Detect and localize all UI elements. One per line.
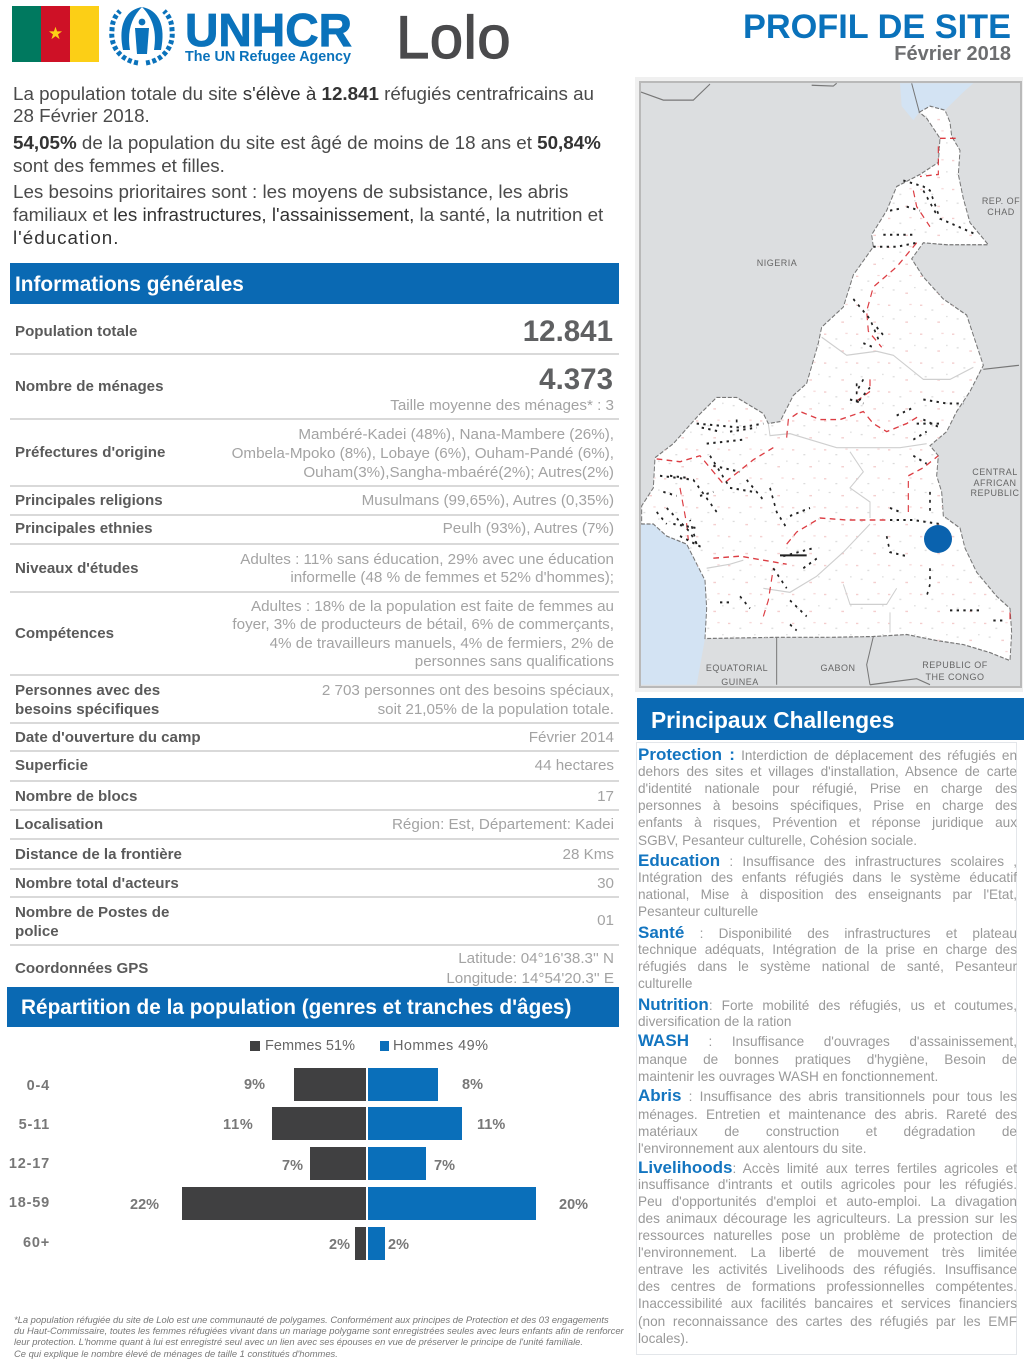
heading: principaux challenges bbox=[637, 698, 1024, 740]
women percentage labels: 9% bbox=[244, 1077, 265, 1093]
men percentage labels: 8% bbox=[462, 1077, 483, 1093]
men percentage labels bbox=[388, 1077, 588, 1253]
panel: general information table bbox=[10, 315, 619, 987]
protection bbox=[638, 745, 1017, 848]
row: coordonnées GPS: Latitude: 04°16'38.3'' N bbox=[458, 950, 614, 967]
row: nombre de ménages: Nombre de ménages bbox=[15, 378, 163, 395]
nutrition bbox=[638, 995, 1017, 1029]
row: nombre de postes de police: Nombre de Postes de bbox=[15, 904, 169, 920]
row: niveaux d'études: informelle (48 % de femmes et 52% d'hommes); bbox=[290, 568, 614, 586]
row: préfectures d'origine bbox=[10, 420, 619, 487]
santé bbox=[638, 923, 1017, 991]
row: nombre de postes de police: police bbox=[15, 922, 59, 940]
livelihoods: ressources naturelles pose un problème de protection de bbox=[638, 1228, 1017, 1243]
row: distance de la frontière: 28 Kms bbox=[562, 846, 614, 863]
education: national, Mise à disposition des enseignants par l'Etat, bbox=[638, 887, 1017, 902]
row: préfectures d'origine: Mambéré-Kadei (48%), Nana-Mambere (26%), bbox=[298, 426, 614, 442]
row: nombre de ménages: 4.373 bbox=[539, 363, 613, 396]
WASH: manque de bonnes pratiques d'hygiène, Besoin de bbox=[638, 1052, 1017, 1067]
row: nombre total d'acteurs: Nombre total d'acteurs bbox=[15, 875, 179, 892]
row: préfectures d'origine: Ombela-Mpoko (8%), Lobaye (6%), Ouham-Pandé (6%), bbox=[232, 444, 614, 462]
row: personnes avec des besoins spécifiques bbox=[10, 676, 619, 724]
age labels: 12-17 bbox=[9, 1156, 50, 1172]
country labels: GABON bbox=[820, 663, 856, 673]
legend: Hommes 49% bbox=[393, 1038, 488, 1054]
row: distance de la frontière bbox=[10, 840, 619, 870]
row: principales ethnies: Peulh (93%), Autres (7%) bbox=[443, 520, 614, 537]
intro text block: sont des femmes et filles. bbox=[13, 155, 225, 176]
education: Intégration des enfants réfugiés dans le système éducatif bbox=[638, 870, 1017, 885]
row: nombre de ménages: Taille moyenne des ménages* : 3 bbox=[390, 397, 614, 414]
women percentage labels: 7% bbox=[282, 1158, 303, 1174]
row: compétences: personnes sans qualifications bbox=[415, 653, 614, 670]
women bars bbox=[182, 1068, 366, 1260]
row: personnes avec des besoins spécifiques: besoins spécifiques bbox=[15, 701, 159, 718]
country labels: REPUBLIC bbox=[970, 488, 1020, 498]
row: compétences bbox=[10, 593, 619, 676]
row: principales religions bbox=[10, 487, 619, 516]
footnote: du Haut-Commissaire, toutes les femmes réfugiées vivant dans un mariage polygame sont enregistrées seules avec leurs enfants afin de renforcer bbox=[14, 1325, 624, 1336]
panel: challenges text bbox=[636, 742, 1017, 1355]
row: niveaux d'études: Niveaux d'études bbox=[15, 560, 139, 577]
row: nombre de postes de police: 01 bbox=[597, 912, 614, 929]
footnote bbox=[14, 1314, 624, 1359]
row: localisation bbox=[10, 811, 619, 840]
UNHCR wordmark: UNHCR bbox=[185, 4, 352, 56]
protection: SGBV, Pesanteur culturelle, Cohésion sociale. bbox=[638, 833, 917, 848]
livelihoods: Livelihoods: Accès limité aux terres fertiles agricoles et bbox=[638, 1158, 1017, 1177]
women percentage labels: 2% bbox=[329, 1237, 350, 1253]
nutrition: diversification de la ration bbox=[638, 1014, 791, 1029]
men percentage labels: 7% bbox=[434, 1158, 455, 1174]
row: nombre total d'acteurs: 30 bbox=[597, 875, 614, 892]
intro text block: l'éducation. bbox=[13, 227, 119, 248]
row: coordonnées GPS: Coordonnées GPS bbox=[15, 960, 148, 977]
santé: Santé : Disponibilité des infrastructures et plateau bbox=[638, 923, 1017, 942]
country labels: NIGERIA bbox=[757, 258, 797, 268]
row: superficie bbox=[10, 752, 619, 782]
external borders bbox=[641, 83, 1019, 685]
men percentage labels: 20% bbox=[559, 1197, 588, 1213]
abris: ménages. Entretien et maintenance des abris. Rareté des bbox=[638, 1107, 1017, 1122]
heading: répartition de la population bbox=[7, 987, 619, 1027]
santé: culturelle bbox=[638, 976, 692, 991]
nutrition: Nutrition: Forte mobilité des réfugiés, us et coutumes, bbox=[638, 995, 1017, 1014]
row: compétences: 4% de travailleurs manuels, 4% de fermiers, 2% de bbox=[270, 635, 614, 652]
WASH: maintenir les ouvrages WASH en fonctionnement. bbox=[638, 1069, 938, 1084]
age labels: 60+ bbox=[23, 1235, 50, 1251]
row: nombre de postes de police bbox=[10, 898, 619, 946]
country labels: THE CONGO bbox=[925, 672, 985, 682]
abris bbox=[638, 1086, 1017, 1156]
men bars bbox=[368, 1068, 536, 1260]
protection: Protection : Interdiction de déplacement des réfugiés en bbox=[638, 745, 1017, 764]
row: compétences: Adultes : 18% de la population est faite de femmes au bbox=[251, 598, 614, 615]
men percentage labels: 2% bbox=[388, 1237, 409, 1253]
intro text block: 28 Février 2018. bbox=[13, 105, 150, 126]
livelihoods: insuffisance d'intrants et outils agricoles pour les réfugiés. bbox=[638, 1177, 1017, 1192]
row: principales ethnies: Principales ethnies bbox=[15, 520, 153, 537]
santé: technique adéquats, Intégration de la prise en charge des bbox=[638, 942, 1017, 957]
faint localities bbox=[642, 106, 1012, 661]
row: principales religions: Musulmans (99,65%), Autres (0,35%) bbox=[362, 492, 614, 509]
row: nombre de blocs bbox=[10, 782, 619, 811]
row: niveaux d'études: Adultes : 11% sans éducation, 29% avec une éducation bbox=[240, 551, 614, 568]
row: distance de la frontière: Distance de la frontière bbox=[15, 846, 182, 863]
protection: personnes à besoins spécifiques, Prise en charge des bbox=[638, 798, 1017, 813]
icon: UNHCR emblem bbox=[109, 7, 175, 66]
row: nombre de blocs: 17 bbox=[597, 788, 614, 805]
age labels bbox=[9, 1078, 50, 1251]
row: date d'ouverture: Date d'ouverture du camp bbox=[15, 729, 201, 746]
WASH: WASH : Insuffisance d'ouvrages d'assainissement, bbox=[638, 1031, 1017, 1050]
row: superficie: Superficie bbox=[15, 757, 88, 774]
row: nombre total d'acteurs bbox=[10, 870, 619, 898]
country labels: EQUATORIAL bbox=[706, 663, 768, 673]
country labels: CENTRAL bbox=[972, 467, 1018, 477]
livelihoods: des animaux décourage les agriculteurs. La pression sur les bbox=[638, 1211, 1017, 1226]
row: population totale: 12.841 bbox=[523, 315, 613, 348]
date: Février 2018 bbox=[894, 43, 1011, 65]
Cameroon territory bbox=[642, 106, 1012, 661]
education bbox=[638, 851, 1017, 919]
water bodies bbox=[641, 83, 973, 685]
site name: Lolo bbox=[396, 4, 511, 71]
row: nombre de ménages bbox=[10, 355, 619, 420]
footnote: *La population réfugiée du site de Lolo est une communauté de polygames. Conformément aux principes de Protection et des 03 engagements bbox=[14, 1314, 609, 1325]
country labels: AFRICAN bbox=[973, 478, 1017, 488]
livelihoods: l'environnement. La liberté de mouvement très limitée bbox=[638, 1245, 1017, 1260]
row: préfectures d'origine: Ouham(3%),Sangha-mbaéré(2%); Autres(2%) bbox=[303, 464, 614, 480]
row: nombre de blocs: Nombre de blocs bbox=[15, 788, 137, 805]
education: Education : Insuffisance des infrastructures scolaires , bbox=[638, 851, 1017, 870]
intro text block: 54,05% de la population du site est âgé de moins de 18 ans et 50,84% bbox=[13, 132, 601, 153]
santé: réfugiés dans le système national de santé, Pesanteur bbox=[638, 959, 1017, 974]
livelihoods: Peu d'opportunités d'emploi et auto-emploi. La divagation bbox=[638, 1194, 1017, 1209]
map background bbox=[640, 82, 1021, 687]
women percentage labels: 22% bbox=[130, 1197, 159, 1213]
legend: Femmes 51% bbox=[265, 1038, 355, 1054]
marker: Lolo site bbox=[924, 525, 952, 553]
footnote: Ce qui explique le nombre élevé de ménages de taille 1 constitués d'hommes. bbox=[14, 1348, 338, 1359]
age labels: 0-4 bbox=[27, 1078, 50, 1094]
heading: informations générales bbox=[10, 263, 619, 304]
row: superficie: 44 hectares bbox=[535, 757, 614, 774]
livelihoods: (non reconnaissance des cartes des réfugiés par les EMF bbox=[638, 1314, 1017, 1329]
internal borders bbox=[707, 337, 973, 633]
heading: informations générales: Informations générales bbox=[15, 273, 244, 296]
row: compétences: foyer, 3% de producteurs de bétail, 6% de commerçants, bbox=[232, 616, 614, 633]
row: préfectures d'origine: Préfectures d'origine bbox=[15, 444, 165, 461]
intro text block: Les besoins prioritaires sont : les moyens de subsistance, les abris bbox=[13, 181, 568, 202]
abris: matériaux de construction et dégradation de bbox=[638, 1124, 1017, 1139]
country labels: REP. OF bbox=[982, 196, 1020, 206]
title: profil de site: PROFIL DE SITE bbox=[743, 8, 1011, 46]
row: personnes avec des besoins spécifiques: Personnes avec des bbox=[15, 682, 160, 699]
panel: map of Cameroon bbox=[635, 77, 1023, 692]
roads bbox=[657, 138, 1010, 622]
WASH bbox=[638, 1031, 1017, 1084]
country labels bbox=[706, 196, 1020, 687]
country labels: CHAD bbox=[987, 207, 1015, 217]
country labels: REPUBLIC OF bbox=[922, 660, 988, 670]
row: coordonnées GPS bbox=[15, 950, 614, 987]
row: localisation: Région: Est, Département: Kadei bbox=[392, 816, 614, 833]
UNHCR wordmark: The UN Refugee Agency bbox=[185, 48, 352, 65]
flag of Cameroon bbox=[12, 6, 99, 62]
heading: répartition de la population: Répartition de la population (genres et tranches d'âges) bbox=[21, 996, 571, 1019]
protection: enfants à risques, Prévention et réponse juridique aux bbox=[638, 815, 1017, 830]
protection: dehors des sites et villages d'installation, Absence de carte bbox=[638, 764, 1017, 779]
intro text block: familiaux et les infrastructures, l'assainissement, la santé, la nutrition et bbox=[13, 204, 603, 225]
heading: principaux challenges: Principaux Challenges bbox=[651, 707, 894, 733]
age labels: 5-11 bbox=[19, 1117, 50, 1133]
intro text block bbox=[13, 83, 604, 248]
livelihoods: entrave les activités Livelihoods des réfugiés. Insuffisance bbox=[638, 1262, 1017, 1277]
localities bbox=[657, 180, 1007, 630]
row: population totale: Population totale bbox=[15, 323, 137, 340]
women percentage labels: 11% bbox=[223, 1117, 254, 1133]
row: principales religions: Principales religions bbox=[15, 492, 163, 509]
legend bbox=[250, 1038, 488, 1054]
intro text block: La population totale du site s'élève à 12.841 réfugiés centrafricains au bbox=[13, 83, 594, 104]
livelihoods bbox=[638, 1158, 1017, 1346]
livelihoods: locales). bbox=[638, 1331, 689, 1346]
men percentage labels: 11% bbox=[477, 1117, 505, 1133]
footnote: leur protection. L'homme quant à lui est enregistré seul avec un lien avec ses épouses en vue de préserver le principe de l'unité familiale. bbox=[14, 1336, 583, 1347]
row: localisation: Localisation bbox=[15, 816, 103, 833]
abris: l'environnement aux alentours du site. bbox=[638, 1141, 867, 1156]
row: date d'ouverture: Février 2014 bbox=[529, 729, 614, 746]
UNHCR logo bbox=[109, 4, 352, 66]
women percentage labels bbox=[130, 1077, 350, 1253]
population pyramid chart bbox=[9, 1038, 588, 1260]
flag of Cameroon: ★ bbox=[48, 24, 63, 43]
education: Pesanteur culturelle bbox=[638, 904, 758, 919]
abris: Abris : Insuffisance des abris transitionnels pour tous les bbox=[638, 1086, 1017, 1105]
livelihoods: Inaccessibilité aux facilités bancaires et services financiers bbox=[638, 1296, 1017, 1311]
row: compétences: Compétences bbox=[15, 625, 114, 642]
row: date d'ouverture bbox=[10, 724, 619, 752]
row: personnes avec des besoins spécifiques: 2 703 personnes ont des besoins spéciaux, bbox=[322, 682, 614, 699]
age labels: 18-59 bbox=[9, 1195, 50, 1211]
protection: d'identité nationale pour réfugié, Prise en charge des bbox=[638, 781, 1017, 796]
row: principales ethnies bbox=[10, 516, 619, 545]
row: population totale bbox=[10, 304, 619, 355]
livelihoods: des centres de formations professionnelles compétentes. bbox=[638, 1279, 1017, 1294]
row: personnes avec des besoins spécifiques: soit 21,05% de la population totale. bbox=[378, 701, 614, 718]
row: niveaux d'études bbox=[10, 545, 619, 593]
country labels: GUINEA bbox=[721, 677, 759, 687]
row: coordonnées GPS: Longitude: 14°54'20.3'' E bbox=[446, 970, 614, 987]
